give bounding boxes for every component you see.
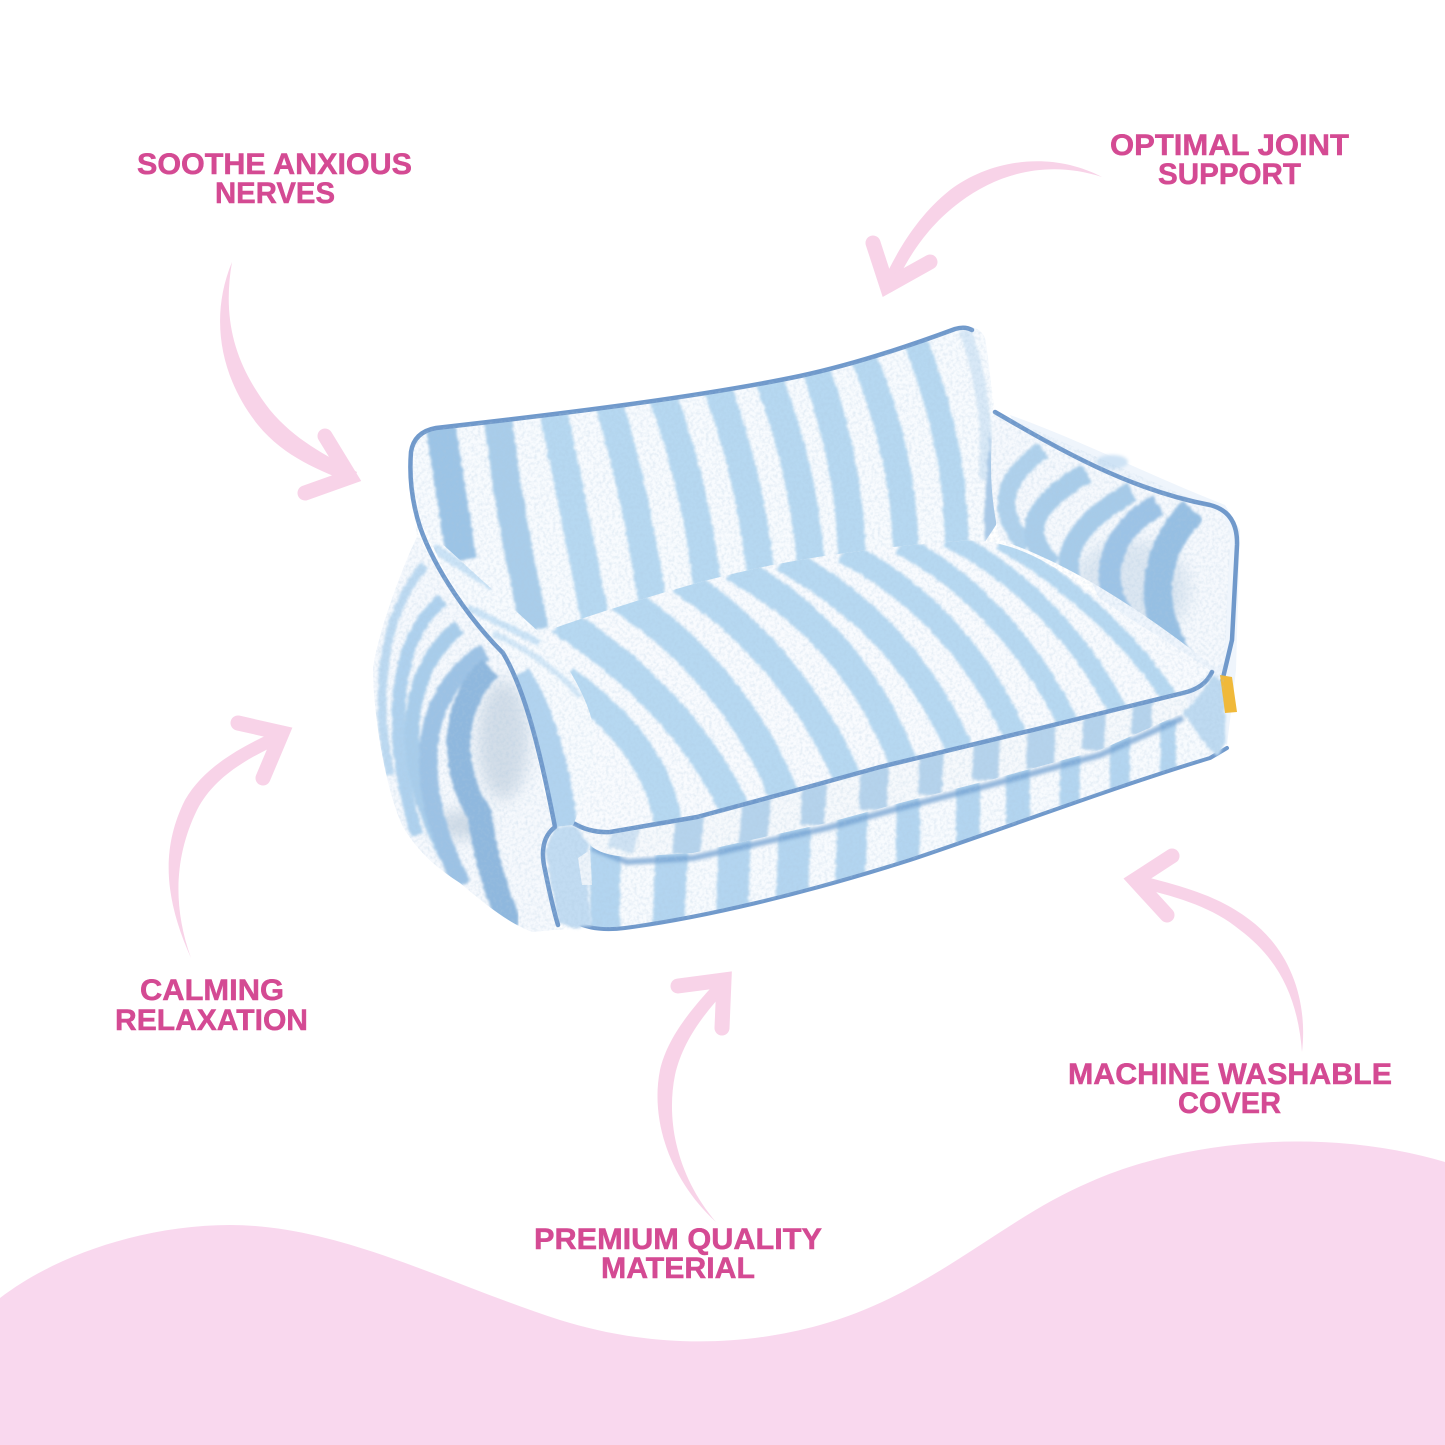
label: machine washable cover: COVER (1178, 1087, 1281, 1120)
left arm front corner (545, 825, 592, 928)
arrow: optimal joint support to sofa (873, 161, 1102, 292)
seat cushion front fold (575, 693, 1190, 857)
label: calming relaxation: RELAXATION (115, 1004, 308, 1037)
label: premium quality material (534, 1223, 822, 1285)
label: machine washable cover (1068, 1058, 1392, 1120)
label: machine washable cover: MACHINE WASHABLE (1068, 1058, 1392, 1091)
label: calming relaxation: CALMING (140, 974, 284, 1007)
product: striped fleece sofa bed (370, 320, 1245, 940)
left arm piping (420, 527, 558, 925)
shadow between cushion and arm (982, 434, 996, 542)
background wave (0, 1142, 1445, 1445)
left arm top face (427, 530, 593, 830)
arrow: machine washable cover to sofa (1131, 856, 1303, 1052)
seat cushion top (540, 538, 1212, 832)
label: premium quality material: MATERIAL (601, 1252, 755, 1285)
label: optimal joint support: SUPPORT (1158, 158, 1301, 191)
label: optimal joint support: OPTIMAL JOINT (1110, 129, 1349, 162)
arrow: calming relaxation to sofa (169, 723, 287, 958)
arrow: soothe anxious nerves to sofa (220, 262, 357, 493)
fleece texture overlay (370, 320, 1245, 940)
right side panel and tag (1183, 675, 1237, 757)
label: soothe anxious nerves (137, 148, 412, 210)
label: soothe anxious nerves: SOOTHE ANXIOUS (137, 148, 412, 181)
label: optimal joint support (1110, 129, 1349, 191)
right arm (991, 412, 1237, 682)
crease shadow (592, 718, 1183, 862)
left arm outer side (373, 537, 558, 932)
arrow: premium quality material to sofa (657, 978, 730, 1222)
back of right arm (1010, 415, 1240, 745)
label: calming relaxation (115, 974, 308, 1037)
label: soothe anxious nerves: NERVES (215, 177, 335, 210)
back cushion (410, 327, 999, 640)
label: premium quality material: PREMIUM QUALITY (534, 1223, 822, 1256)
base cushion (575, 708, 1227, 930)
